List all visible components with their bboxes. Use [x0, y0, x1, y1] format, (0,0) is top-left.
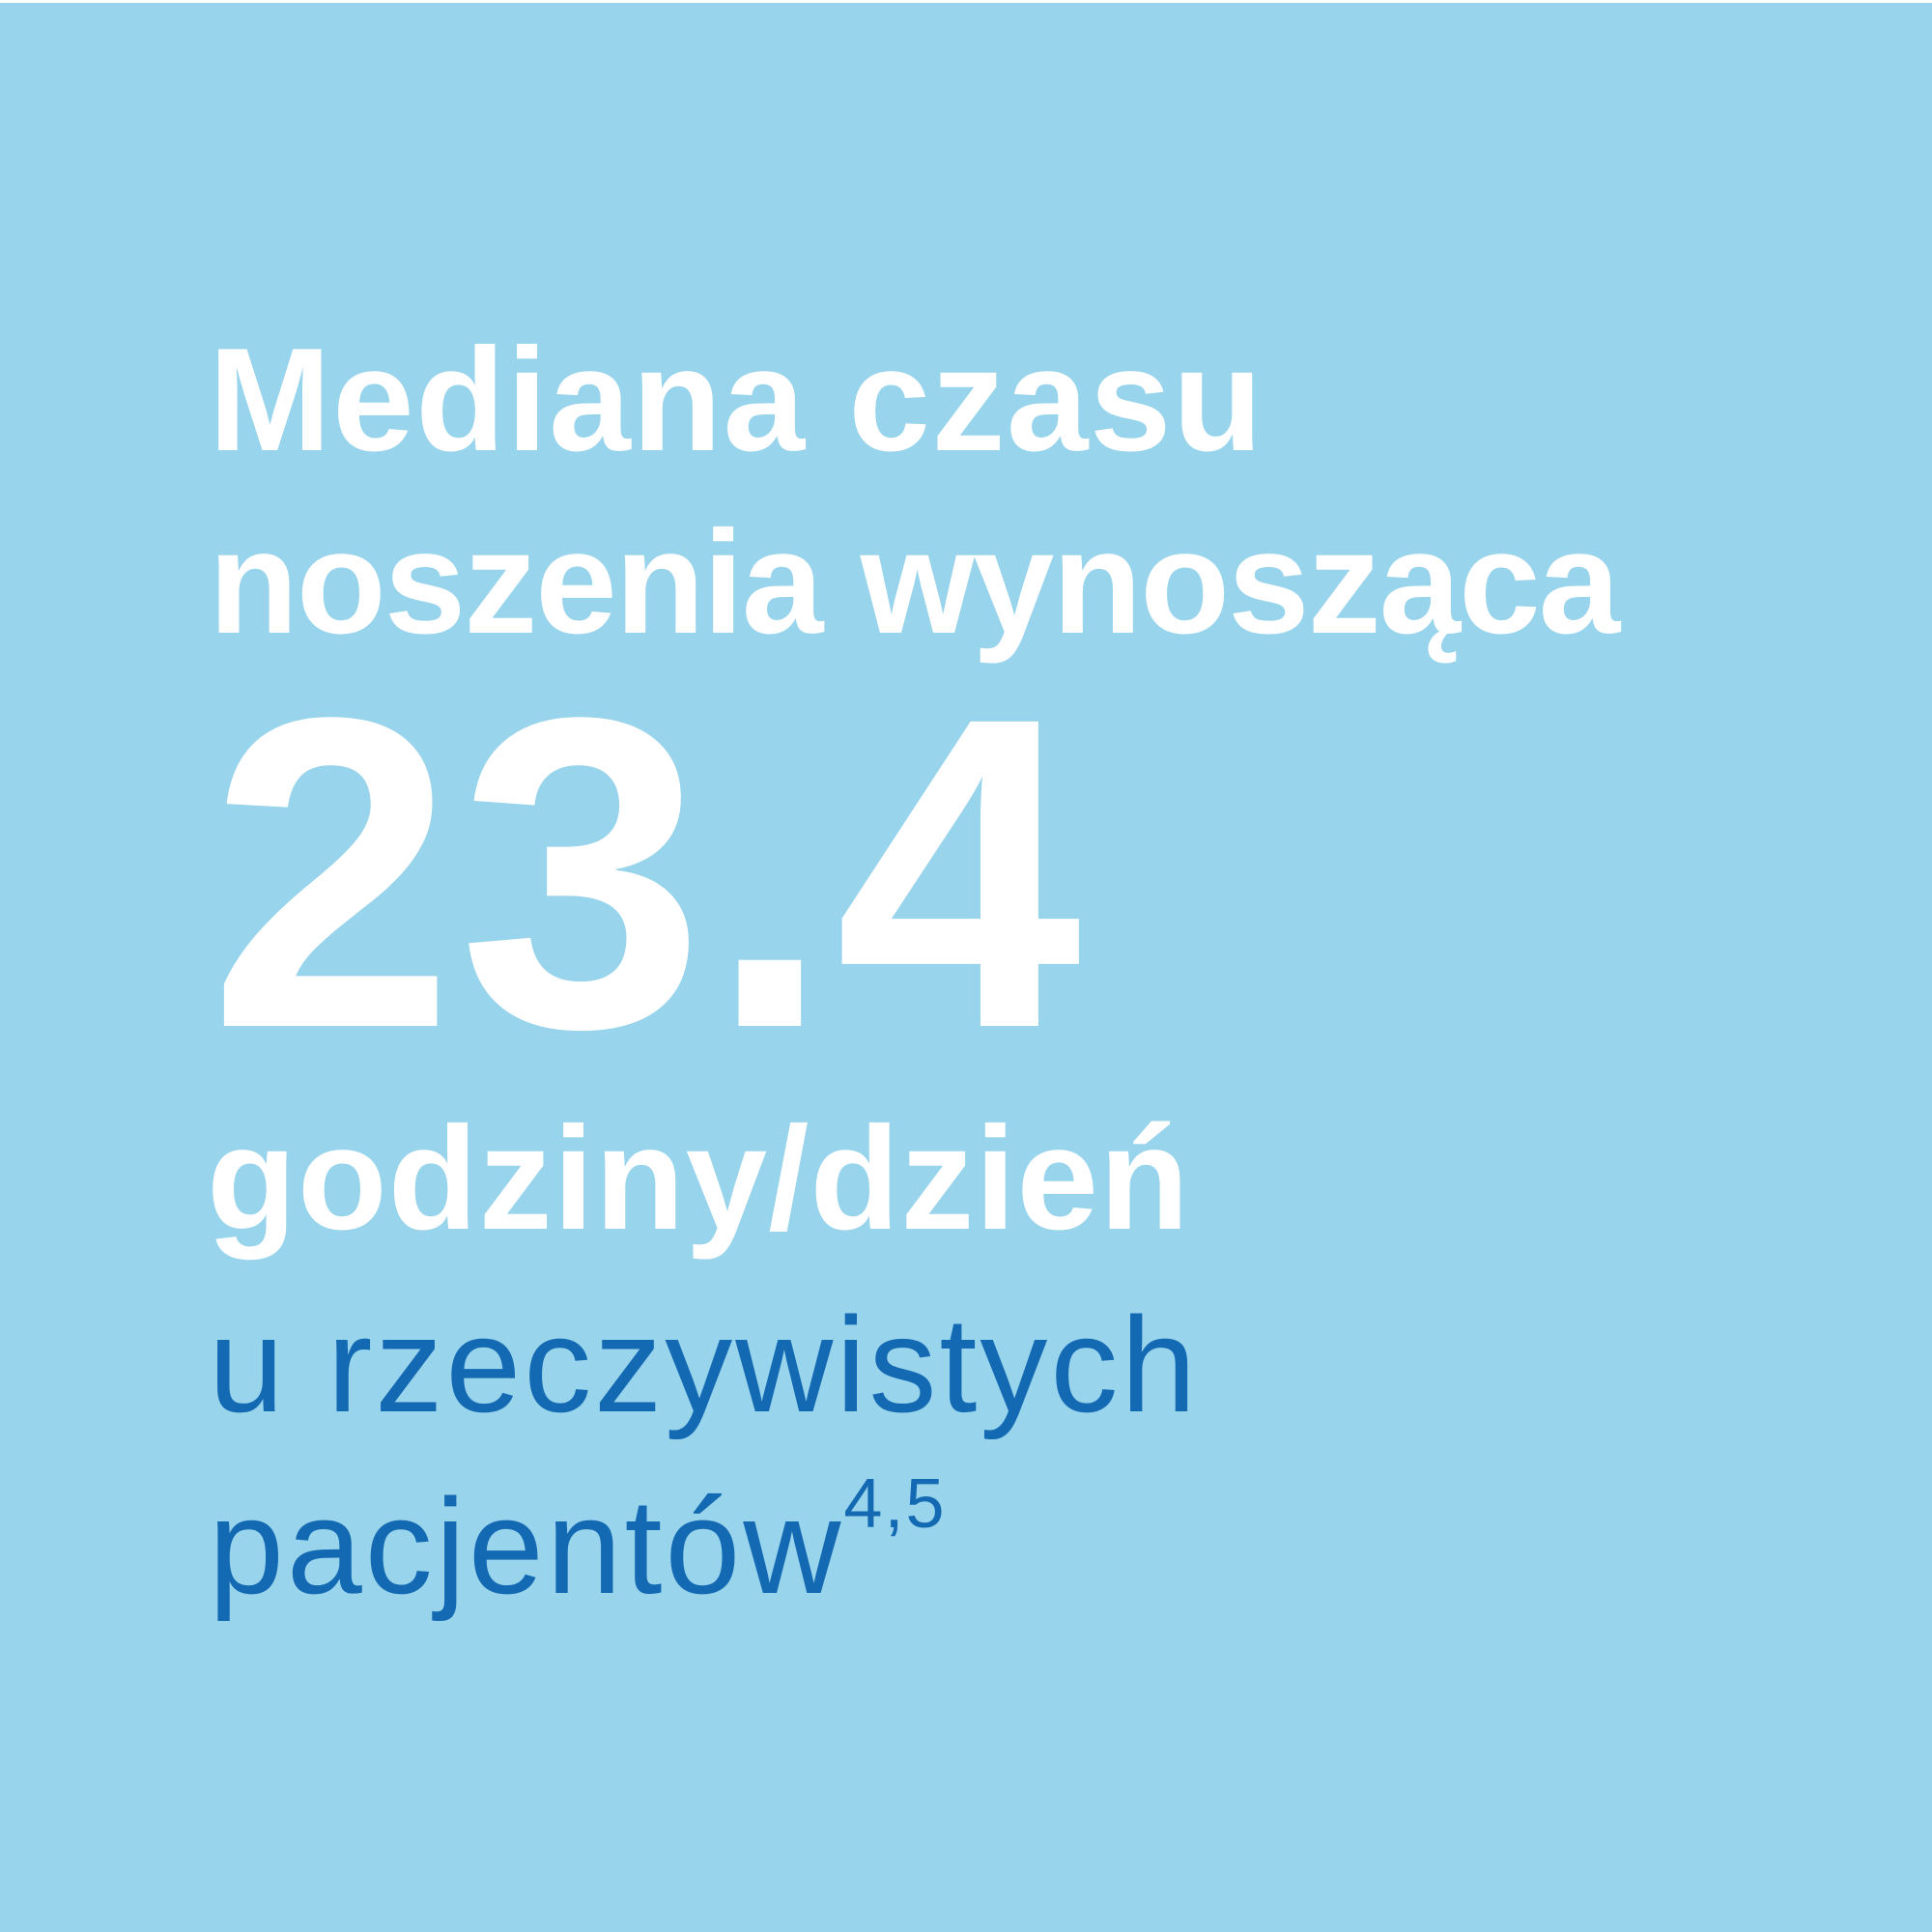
heading line 2: noszenia wynosząca [209, 500, 1618, 665]
subtitle line 1: u rzeczywistych [209, 1289, 1199, 1440]
big number: 23.4 [209, 626, 1085, 1121]
unit line: godziny/dzień [207, 1096, 1190, 1261]
heading line 1: Mediana czasu [209, 318, 1264, 482]
top border line [0, 0, 1932, 3]
subtitle line 2 with reference: pacjentów4,5 [209, 1465, 947, 1622]
heading text block [207, 318, 1621, 1622]
